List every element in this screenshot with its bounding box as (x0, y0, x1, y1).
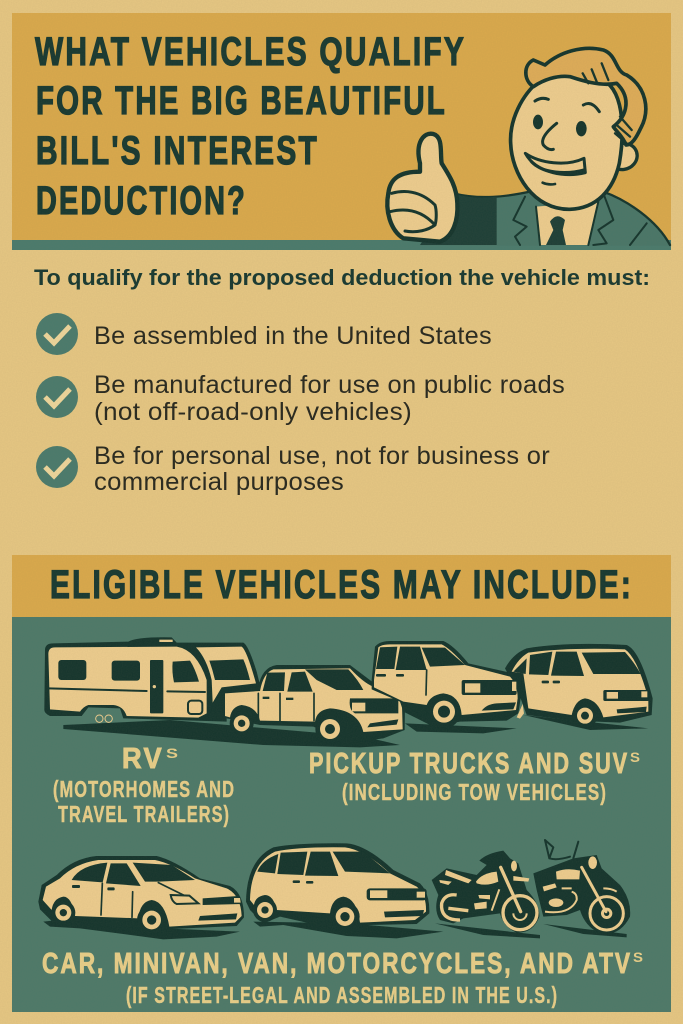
label: cars, minivans, vans, motorcycles and ATVs: S (633, 949, 643, 965)
icon: car and minivan (38, 843, 443, 939)
mascot ear (613, 143, 637, 170)
rear motorcycle (533, 840, 630, 934)
requirement 2: Be manufactured for use on public roads (94, 371, 565, 399)
subheading: To qualify for the proposed deduction the vehicle must: (34, 265, 650, 290)
label: pickup trucks and SUVs (309, 748, 640, 805)
front motorcycle (432, 851, 539, 933)
label: RVs: TRAVEL TRAILERS) (58, 801, 230, 827)
title: DEDUCTION? (36, 179, 247, 223)
icon: check 1 (36, 313, 78, 355)
mascot hand (387, 134, 457, 242)
icon: motorcycles (432, 840, 630, 938)
RV trailer (44, 637, 262, 722)
title: BILL'S INTEREST (36, 129, 319, 173)
SUV (372, 641, 521, 728)
mascot face (511, 75, 622, 209)
icon: check 2 (36, 376, 78, 418)
title: FOR THE BIG BEAUTIFUL (36, 79, 447, 123)
van (505, 644, 653, 728)
car (38, 856, 244, 936)
requirement 3: Be for personal use, not for business or (94, 442, 550, 470)
mascot suit (420, 192, 670, 246)
mascot smile (525, 153, 585, 175)
panel: header (12, 13, 671, 250)
panel: eligible vehicles (12, 617, 671, 1012)
label: cars, minivans, vans, motorcycles and ATVs (42, 948, 643, 1008)
mascot shirt and tie (536, 202, 598, 245)
title (35, 30, 466, 223)
requirement 1: Be assembled in the United States (94, 322, 492, 350)
requirement 3: commercial purposes (94, 468, 344, 496)
icon: thumbs-up mascot (387, 48, 670, 246)
label: RVs: RV (122, 743, 164, 775)
requirement 3 (94, 442, 550, 496)
icon: check 3 (36, 446, 78, 488)
mascot nose (543, 123, 557, 150)
label: RVs (53, 743, 235, 827)
label: pickup trucks and SUVs: S (630, 749, 640, 765)
requirement 2: (not off-road-only vehicles) (94, 398, 412, 426)
title: WHAT VEHICLES QUALIFY (35, 30, 466, 74)
label: RVs: (MOTORHOMES AND (53, 776, 235, 802)
label: RVs: S (166, 745, 178, 761)
panel: requirements checklist (36, 313, 565, 496)
pickup (223, 665, 405, 744)
panel: eligible vehicles banner (12, 555, 671, 618)
icon: SUV and van (372, 641, 653, 733)
requirement 2 (94, 371, 565, 426)
icon: RV and pickup (44, 637, 405, 747)
minivan (246, 843, 429, 932)
mascot eyes and brows (533, 115, 543, 129)
mascot hair (526, 48, 646, 145)
